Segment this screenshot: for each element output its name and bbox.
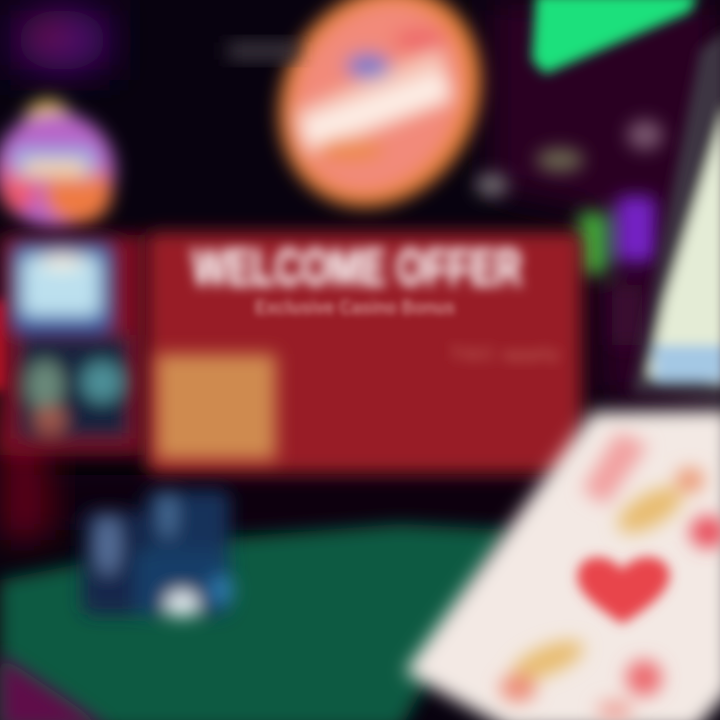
panel headline: WELCOME OFFER xyxy=(192,239,522,297)
left red strip xyxy=(0,300,12,390)
playing card xyxy=(405,410,720,720)
neon sign: top left purple xyxy=(18,10,106,70)
orange bonus block xyxy=(156,354,276,460)
poker chip stacks xyxy=(82,490,234,617)
green neon sign: top right xyxy=(532,0,698,74)
green poker table xyxy=(0,524,510,720)
panel small caption: T&C apply xyxy=(450,344,560,364)
neon oval sign: center top xyxy=(240,0,520,244)
card pips xyxy=(500,432,720,720)
table corner: magenta edge xyxy=(0,655,110,720)
background glow: upper right maroon wall xyxy=(0,0,720,540)
panel subheading: Exclusive Casino Bonus xyxy=(255,297,455,319)
left slot machine column xyxy=(0,235,145,455)
faint grey streak left of oval xyxy=(228,42,298,60)
laptop screen xyxy=(632,30,720,400)
red promo panel xyxy=(146,232,582,474)
card heart xyxy=(577,557,670,624)
left neon sign: rainbow circle xyxy=(0,100,115,228)
small lights: upper right xyxy=(476,120,663,196)
green and purple tabs right of panel xyxy=(578,196,656,345)
